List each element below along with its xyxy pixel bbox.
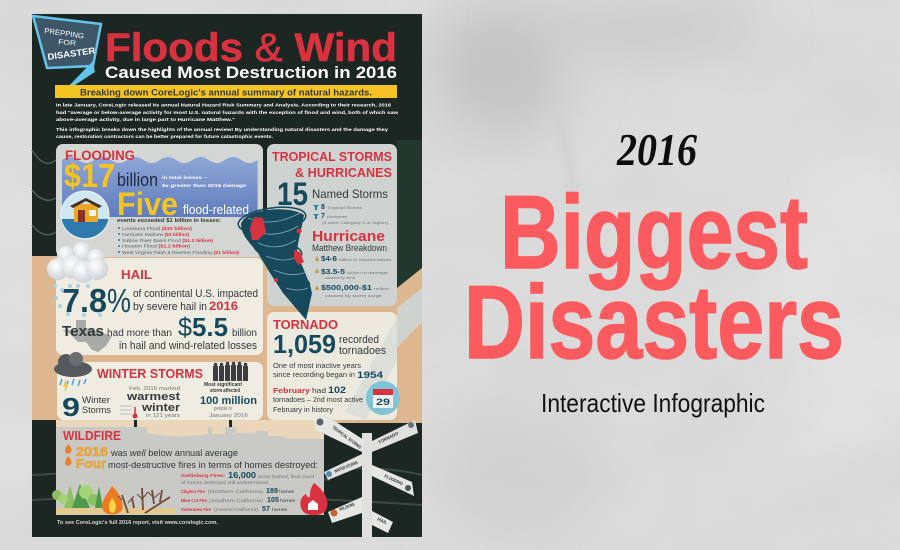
- flood event list: Louisiana Flood ($10 billion): [122, 226, 193, 231]
- panel: wildfire: [52, 427, 328, 515]
- stat: 9 winter storms: [62, 392, 111, 422]
- stat: 17 billion: [64, 157, 247, 194]
- flood event list: [117, 218, 240, 255]
- wildfire summary: was well below annual average: [110, 448, 238, 458]
- stat: 15 named storms: (3 were Category 3 or higher): [322, 220, 389, 225]
- wildfire list: of homes destroyed still undetermined: [181, 480, 268, 486]
- hurricane damage figures: caused by wind: [325, 275, 355, 280]
- badge: Prepping for Disaster: FOR: [58, 39, 76, 48]
- intro text: cause, restoration contractors can be better prepared for future catastrophic events.: [56, 134, 273, 140]
- footer link text: To see CoreLogic's full 2016 report, visit www.corelogic.com.: [57, 520, 219, 526]
- stat: 1,059 tornadoes: recorded: [339, 334, 379, 346]
- heading: Biggest Disasters: Biggest: [500, 175, 808, 291]
- wildfire list: 16,000: [228, 471, 257, 480]
- panel: hail: [56, 258, 263, 355]
- heading: tropical storms: TROPICAL STORMS: [272, 149, 392, 164]
- heading: hail: HAIL: [121, 267, 152, 282]
- flood event list: West Virginia Flash & Riverine Flooding ($1 billion): [122, 250, 240, 255]
- stat: warmest winter: [120, 386, 181, 419]
- stat: 15 named storms: 15: [277, 176, 308, 212]
- wildfire list: 189: [266, 488, 278, 495]
- stat: 1,059 tornadoes: tornadoes: [339, 345, 386, 357]
- sign: wildfire: WILDFIRE: [339, 502, 355, 512]
- stat: Texas losses: $: [178, 312, 193, 342]
- wildfire summary: most-destructive fires in terms of homes destroyed:: [108, 460, 318, 470]
- stat: five flood-related: flood-related: [183, 202, 249, 217]
- stat: 7.8 percent: 2016: [209, 299, 238, 313]
- flood event list: Hurricane Matthew ($3 billion): [122, 232, 190, 237]
- heading: flooding: FLOODING: [65, 147, 135, 163]
- title: Caused Most Destruction in 2016: [105, 63, 397, 82]
- flood event list: Houston Flood ($1.2 billion): [122, 244, 191, 248]
- intro text: above-average activity, due in large part to Hurricane Matthew.": [56, 117, 235, 123]
- stat: warmest winter: warmest: [126, 391, 180, 403]
- stat: 17 billion: 6x greater than 2015 damage: [162, 183, 247, 188]
- stat: Texas losses: Texas: [62, 323, 104, 340]
- badge: Prepping for Disaster: DISASTER: [47, 45, 96, 62]
- stat: 7.8 percent: 7.8: [62, 282, 107, 319]
- wildfire list: Soberanes Fire: [181, 507, 211, 513]
- text: Interactive Infographic: Interactive Infographic: [541, 388, 765, 418]
- stat: 7.8 percent: of continental U.S. impacted: [133, 288, 258, 300]
- wildfire summary: 2016: [76, 444, 108, 459]
- subtitle banner: Breaking down CoreLogic's annual summary of natural hazards.: [80, 87, 372, 97]
- wildfire summary: [65, 444, 318, 471]
- stat: 15 named storms: Named Storms: [312, 187, 388, 201]
- heading: Biggest Disasters: [464, 175, 844, 381]
- tornado facts: February: [273, 386, 311, 395]
- sign: winter storm: WINTER STORMS: [334, 460, 359, 474]
- wildfire list: (Northern California): [208, 489, 264, 495]
- intro text: [56, 102, 398, 140]
- wildfire list: Blue Cut Fire: [181, 498, 207, 504]
- heading: tropical storms: [272, 149, 392, 180]
- wildfire list: 105: [267, 497, 279, 504]
- hurricane damage figures: $4-6: [321, 256, 337, 263]
- tornado facts: 1954: [357, 370, 383, 380]
- icon: signpost: [313, 415, 418, 537]
- stat: Texas losses: in hail and wind-related losses: [119, 340, 257, 352]
- stat: 17 billion: in total losses –: [162, 175, 208, 180]
- wildfire list: (Central California): [214, 507, 258, 513]
- badge: Prepping for Disaster: [33, 16, 101, 94]
- heading: wildfire: WILDFIRE: [63, 428, 121, 443]
- stat: 7.8 percent: %: [107, 282, 131, 319]
- heading: Hurricane Matthew breakdown: [312, 228, 387, 253]
- wildfire list: homes: [280, 498, 296, 504]
- stat: 9 winter storms: Storms: [82, 405, 111, 415]
- stat: Texas losses: had more than: [107, 328, 172, 339]
- wildfire list: [181, 471, 315, 513]
- stat: 15 named storms: [277, 176, 389, 225]
- tornado facts: 102: [328, 385, 346, 395]
- stat: 9 winter storms: Winter: [82, 395, 110, 405]
- flood event list: events exceeded $1 billion in losses:: [117, 218, 221, 224]
- icon: crowd of people: [213, 362, 248, 381]
- stat: 17 billion: $17: [64, 157, 115, 194]
- intro text: had "average or below-average activity for most U.S. natural hazards with the exception of flood and wind, both of which saw: [56, 110, 398, 116]
- stat: 15 named storms: 7: [321, 213, 325, 220]
- stat: warmest winter: in 121 years: [146, 413, 180, 419]
- stat: 100 million people: [200, 382, 257, 419]
- intro text: This infographic breaks down the highlights of the annual review! By understanding natural disasters and the damage they: [56, 127, 388, 133]
- panel: winter storms: [57, 362, 263, 422]
- icon: tornado: [237, 203, 312, 320]
- hurricane damage figures: billion in insured losses: [339, 257, 391, 262]
- tornado facts: tornadoes – 2nd most active: [273, 397, 363, 404]
- stat: 1,059 tornadoes: 1,059: [273, 329, 336, 359]
- icon: burning house: [300, 483, 328, 515]
- flood event list: Sabine River Basin Flood ($1.3 billion): [122, 238, 214, 243]
- intro text: In late January, CoreLogic released its annual Natural Hazard Risk Summary and Analysis. According to their research, 2016: [56, 102, 391, 108]
- heading: winter storms: WINTER STORMS: [97, 366, 203, 381]
- wildfire list: acres burned; final count: [258, 474, 315, 480]
- hurricane damage figures: $3.5-5: [321, 269, 345, 276]
- wildfire list: Clayton Fire: [181, 489, 205, 495]
- stat: 9 winter storms: 9: [62, 392, 80, 422]
- stat: 100 million people: people in: [214, 406, 232, 412]
- heading: Hurricane Matthew breakdown: Matthew Breakdown: [312, 243, 387, 253]
- stat: 17 billion: billion: [117, 170, 158, 190]
- stat: five flood-related: [117, 186, 249, 222]
- hurricane damage figures: caused by storm surge: [325, 293, 383, 298]
- stat: Texas losses: [62, 312, 257, 352]
- tornado facts: One of most inactive years: [273, 361, 361, 370]
- stat: 100 million people: January 2016: [209, 413, 248, 419]
- panel: tropical storms and hurricanes: [267, 144, 397, 306]
- sign: hail: HAIL: [377, 516, 388, 525]
- title: Floods & Wind: [105, 26, 397, 70]
- wildfire list: (Southern California): [209, 498, 263, 504]
- stat: 15 named storms: 8: [321, 204, 325, 211]
- wildfire summary: Four: [76, 456, 106, 471]
- stat: Texas losses: billion: [232, 328, 257, 339]
- hurricane damage figures: [315, 256, 391, 298]
- subtitle banner: [55, 85, 397, 98]
- stat: Texas losses: 5.5: [192, 312, 228, 342]
- stat: warmest winter: winter: [141, 402, 181, 414]
- tornado facts: [273, 361, 383, 414]
- stat: 100 million people: storm affected: [210, 388, 240, 394]
- wildfire list: 57: [262, 506, 270, 513]
- poster background: [32, 14, 422, 537]
- icon: calendar February 29: 29: [376, 397, 390, 407]
- tornado facts: February in history: [273, 407, 334, 414]
- icon: flooded house: [61, 191, 109, 239]
- icon: forest and fire: [52, 484, 176, 514]
- wildfire list: homes: [279, 489, 295, 495]
- panel: flooding: [56, 144, 263, 257]
- poster: Floods and Wind infographic: [32, 14, 422, 537]
- stat: 100 million people: Most significant: [204, 382, 242, 388]
- stat: 7.8 percent: [62, 282, 258, 319]
- badge: Prepping for Disaster: PREPPING: [44, 26, 85, 41]
- hurricane damage figures: $500,000-$1: [321, 285, 372, 292]
- heading: Hurricane Matthew breakdown: Hurricane: [312, 228, 385, 245]
- stat: 7.8 percent: by severe hail in: [133, 301, 207, 313]
- heading: tropical storms: & HURRICANES: [295, 165, 392, 180]
- sign: tropical storms: TROPICAL STORMS: [331, 425, 362, 450]
- wildfire list: Gatlinburg Fires:: [181, 473, 225, 479]
- stat: 1,059 tornadoes: [273, 329, 386, 359]
- stat: 100 million people: 100 million: [200, 395, 257, 407]
- icon: Texas silhouette: [62, 320, 112, 352]
- panel: tornado: [267, 312, 400, 420]
- stat: warmest winter: Feb. 2016 marked: [129, 386, 180, 392]
- stat: 15 named storms: Tropical Storms: [327, 205, 362, 210]
- icon: hail cloud: [47, 242, 108, 317]
- stat: five flood-related: Five: [117, 186, 178, 222]
- stat: 15 named storms: Hurricanes: [327, 214, 347, 219]
- tornado facts: since recording began in: [273, 370, 355, 379]
- heading: tornado: TORNADO: [273, 317, 338, 332]
- sign: flooding: FLOODING: [384, 473, 404, 487]
- hurricane damage figures: billion in damage: [347, 270, 389, 275]
- wildfire list: homes: [272, 507, 288, 513]
- sign: tornado: TORNADO: [377, 431, 400, 445]
- icon: storm cloud with rain: [54, 352, 92, 391]
- hurricane damage figures: million: [374, 286, 389, 291]
- text: 2016: 2016: [616, 124, 697, 175]
- tornado facts: had: [312, 386, 326, 395]
